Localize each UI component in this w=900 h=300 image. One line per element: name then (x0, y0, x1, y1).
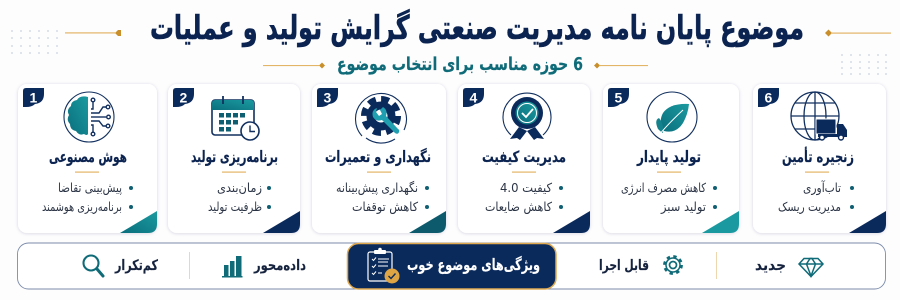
list: تاب‌آوری (803, 180, 841, 196)
panel: features bar (18, 243, 886, 289)
subtitle ornament right (594, 62, 648, 68)
card title: هوش مصنوعی (49, 148, 127, 166)
icon: AI brain circuit (64, 92, 114, 142)
card title: زنجیره تأمین (782, 147, 854, 166)
feature: new (755, 258, 823, 276)
panel: card 5 sustainable production (603, 84, 739, 233)
list: کیفیت 4.0 (500, 180, 552, 195)
list (42, 180, 133, 215)
list (208, 180, 271, 215)
icon: quality rosette (503, 93, 551, 140)
feature: data driven: داده‌محور (253, 258, 306, 274)
badge 3 (317, 88, 338, 107)
list: نگهداری پیش‌بینانه (336, 180, 418, 196)
highlighted label (348, 244, 556, 289)
badge 4 (463, 88, 484, 107)
icon: gear and wrench (355, 93, 406, 143)
list: برنامه‌ریزی هوشمند (42, 199, 122, 215)
list: پیش‌بینی تقاضا (58, 180, 122, 196)
panel: card 4 quality management (458, 84, 590, 233)
panel: card 6 supply chain (753, 84, 886, 233)
card title: تولید پایدار (636, 148, 701, 167)
subtitle ornament left (263, 62, 325, 68)
panel: card 1 artificial intelligence (18, 84, 157, 233)
icon: globe and truck (791, 92, 847, 140)
card title: نگهداری و تعمیرات (325, 147, 431, 166)
decoration: right header ornament (825, 30, 891, 75)
list: زمان‌بندی (217, 180, 262, 196)
card title: برنامه‌ریزی تولید (191, 148, 278, 166)
panel: card 2 production planning (168, 84, 300, 233)
feature: feasible: قابل اجرا (599, 258, 649, 274)
icon: calendar with clock (212, 96, 259, 140)
feature: non-repetitive (84, 256, 158, 276)
badge 6 (758, 88, 779, 107)
list: کاهش ضایعات (485, 199, 552, 215)
list: کاهش توقفات (352, 199, 418, 215)
list: مدیریت ریسک (778, 199, 841, 215)
badge 6: 6 (764, 90, 772, 106)
list (485, 180, 563, 215)
badge 5 (608, 88, 629, 107)
badge 4: 4 (470, 90, 478, 106)
list (621, 180, 717, 215)
card title: مدیریت کیفیت (482, 148, 566, 166)
feature: non-repetitive: کم‌تکرار (114, 258, 158, 274)
badge 1: 1 (30, 90, 38, 106)
badge 2 (173, 88, 194, 107)
list (778, 180, 854, 215)
highlighted label: ویژگی‌های موضوع خوب (407, 255, 540, 274)
panel: card 3 maintenance (312, 84, 446, 233)
icon: clipboard check (368, 248, 400, 284)
badge 1 (23, 88, 44, 107)
badge 5: 5 (614, 90, 622, 106)
list: کاهش مصرف انرژی (621, 180, 706, 196)
decoration: left header ornament (11, 30, 121, 54)
icon: leaf (647, 92, 697, 142)
list: ظرفیت تولید (208, 199, 262, 215)
subtitle: 6 حوزه مناسب برای انتخاب موضوع (337, 54, 583, 75)
badge 2: 2 (180, 90, 188, 106)
list (336, 180, 429, 215)
feature: new: جدید (755, 258, 786, 274)
list: تولید سبز (660, 199, 706, 215)
feature: data driven (222, 256, 306, 278)
badge 3: 3 (324, 90, 332, 106)
